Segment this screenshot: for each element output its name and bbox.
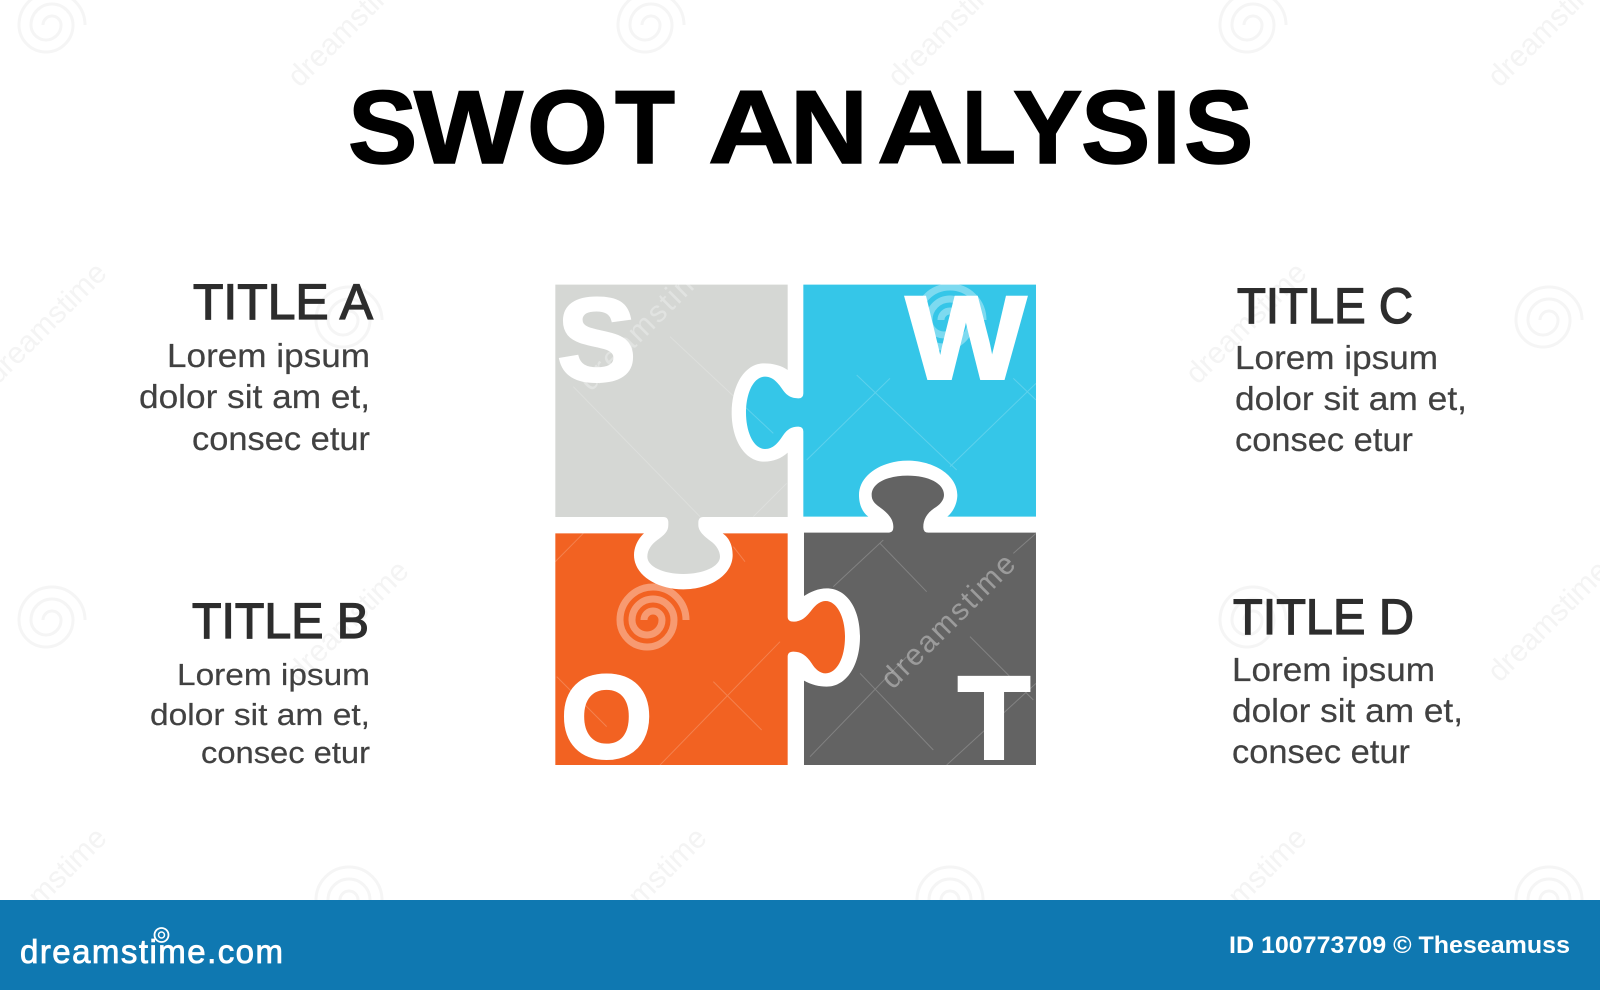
text block: title D: dolor sit am et, [1232,692,1463,729]
text block: title A: TITLE A [193,274,374,330]
text block: title C [1235,278,1467,458]
watermark layer: faint spirals and wordmarks on the page background: dreamstime [1179,821,1313,955]
footer credit: ID 100773709 © Theseamuss [1229,932,1570,959]
text block: title C: TITLE C [1237,278,1413,334]
text block: title A: consec etur [192,420,370,457]
title: Y [1013,70,1082,186]
text block: title D: consec etur [1232,733,1410,770]
text block: title A: dolor sit am et, [139,378,370,415]
watermark overlay on the puzzle: dreamstime [572,249,720,397]
title: S [348,70,417,186]
text block: title B: dolor sit am et, [150,697,370,732]
title: W [414,70,524,186]
puzzle piece: O (orange) [555,533,845,783]
title: O [527,70,608,186]
text block: title C: dolor sit am et, [1235,380,1467,417]
text block: title C: Lorem ipsum [1235,339,1438,376]
title: N [790,70,868,186]
text block: title C: consec etur [1235,421,1413,458]
SWOT puzzle [555,272,1036,784]
puzzle piece: T (dark grey) [804,476,1036,784]
title: S [1081,70,1150,186]
puzzle piece: W (blue) [746,272,1036,517]
puzzle piece: S (grey): S [557,275,636,407]
text block: title B: Lorem ipsum [177,657,370,692]
title: A [708,70,794,186]
text block: title B: consec etur [201,735,370,770]
footer logo: dreamstime.com: dreamstime.com [20,933,283,970]
text block: title A: Lorem ipsum [167,337,370,374]
watermark layer: faint spirals and wordmarks on the page background: dreamstime [579,821,713,955]
watermark layer: faint spirals and wordmarks on the page background: dreamstime [281,554,415,688]
text block: title D: Lorem ipsum [1232,651,1435,688]
title: L [962,70,1016,186]
puzzle piece: O (orange): O [561,651,653,783]
footer bar [0,900,1600,990]
text block: title B [150,593,370,770]
puzzle piece: S (grey) [555,275,788,574]
puzzle piece: W (blue): W [906,272,1026,404]
text block: title B: TITLE B [192,593,369,649]
title: T [615,70,675,186]
watermark overlay on the puzzle: dreamstime [874,547,1022,695]
watermark layer: faint spirals and wordmarks on the page background: dreamstime [1179,256,1313,390]
title: S [1184,70,1253,186]
title: A [877,70,963,186]
title: I [1152,70,1181,186]
text block: title D [1232,589,1463,770]
watermark overlay on the puzzle [555,249,1036,765]
puzzle piece: T (dark grey): T [958,652,1030,784]
text block: title D: TITLE D [1233,589,1414,645]
text block: title A [139,274,374,457]
